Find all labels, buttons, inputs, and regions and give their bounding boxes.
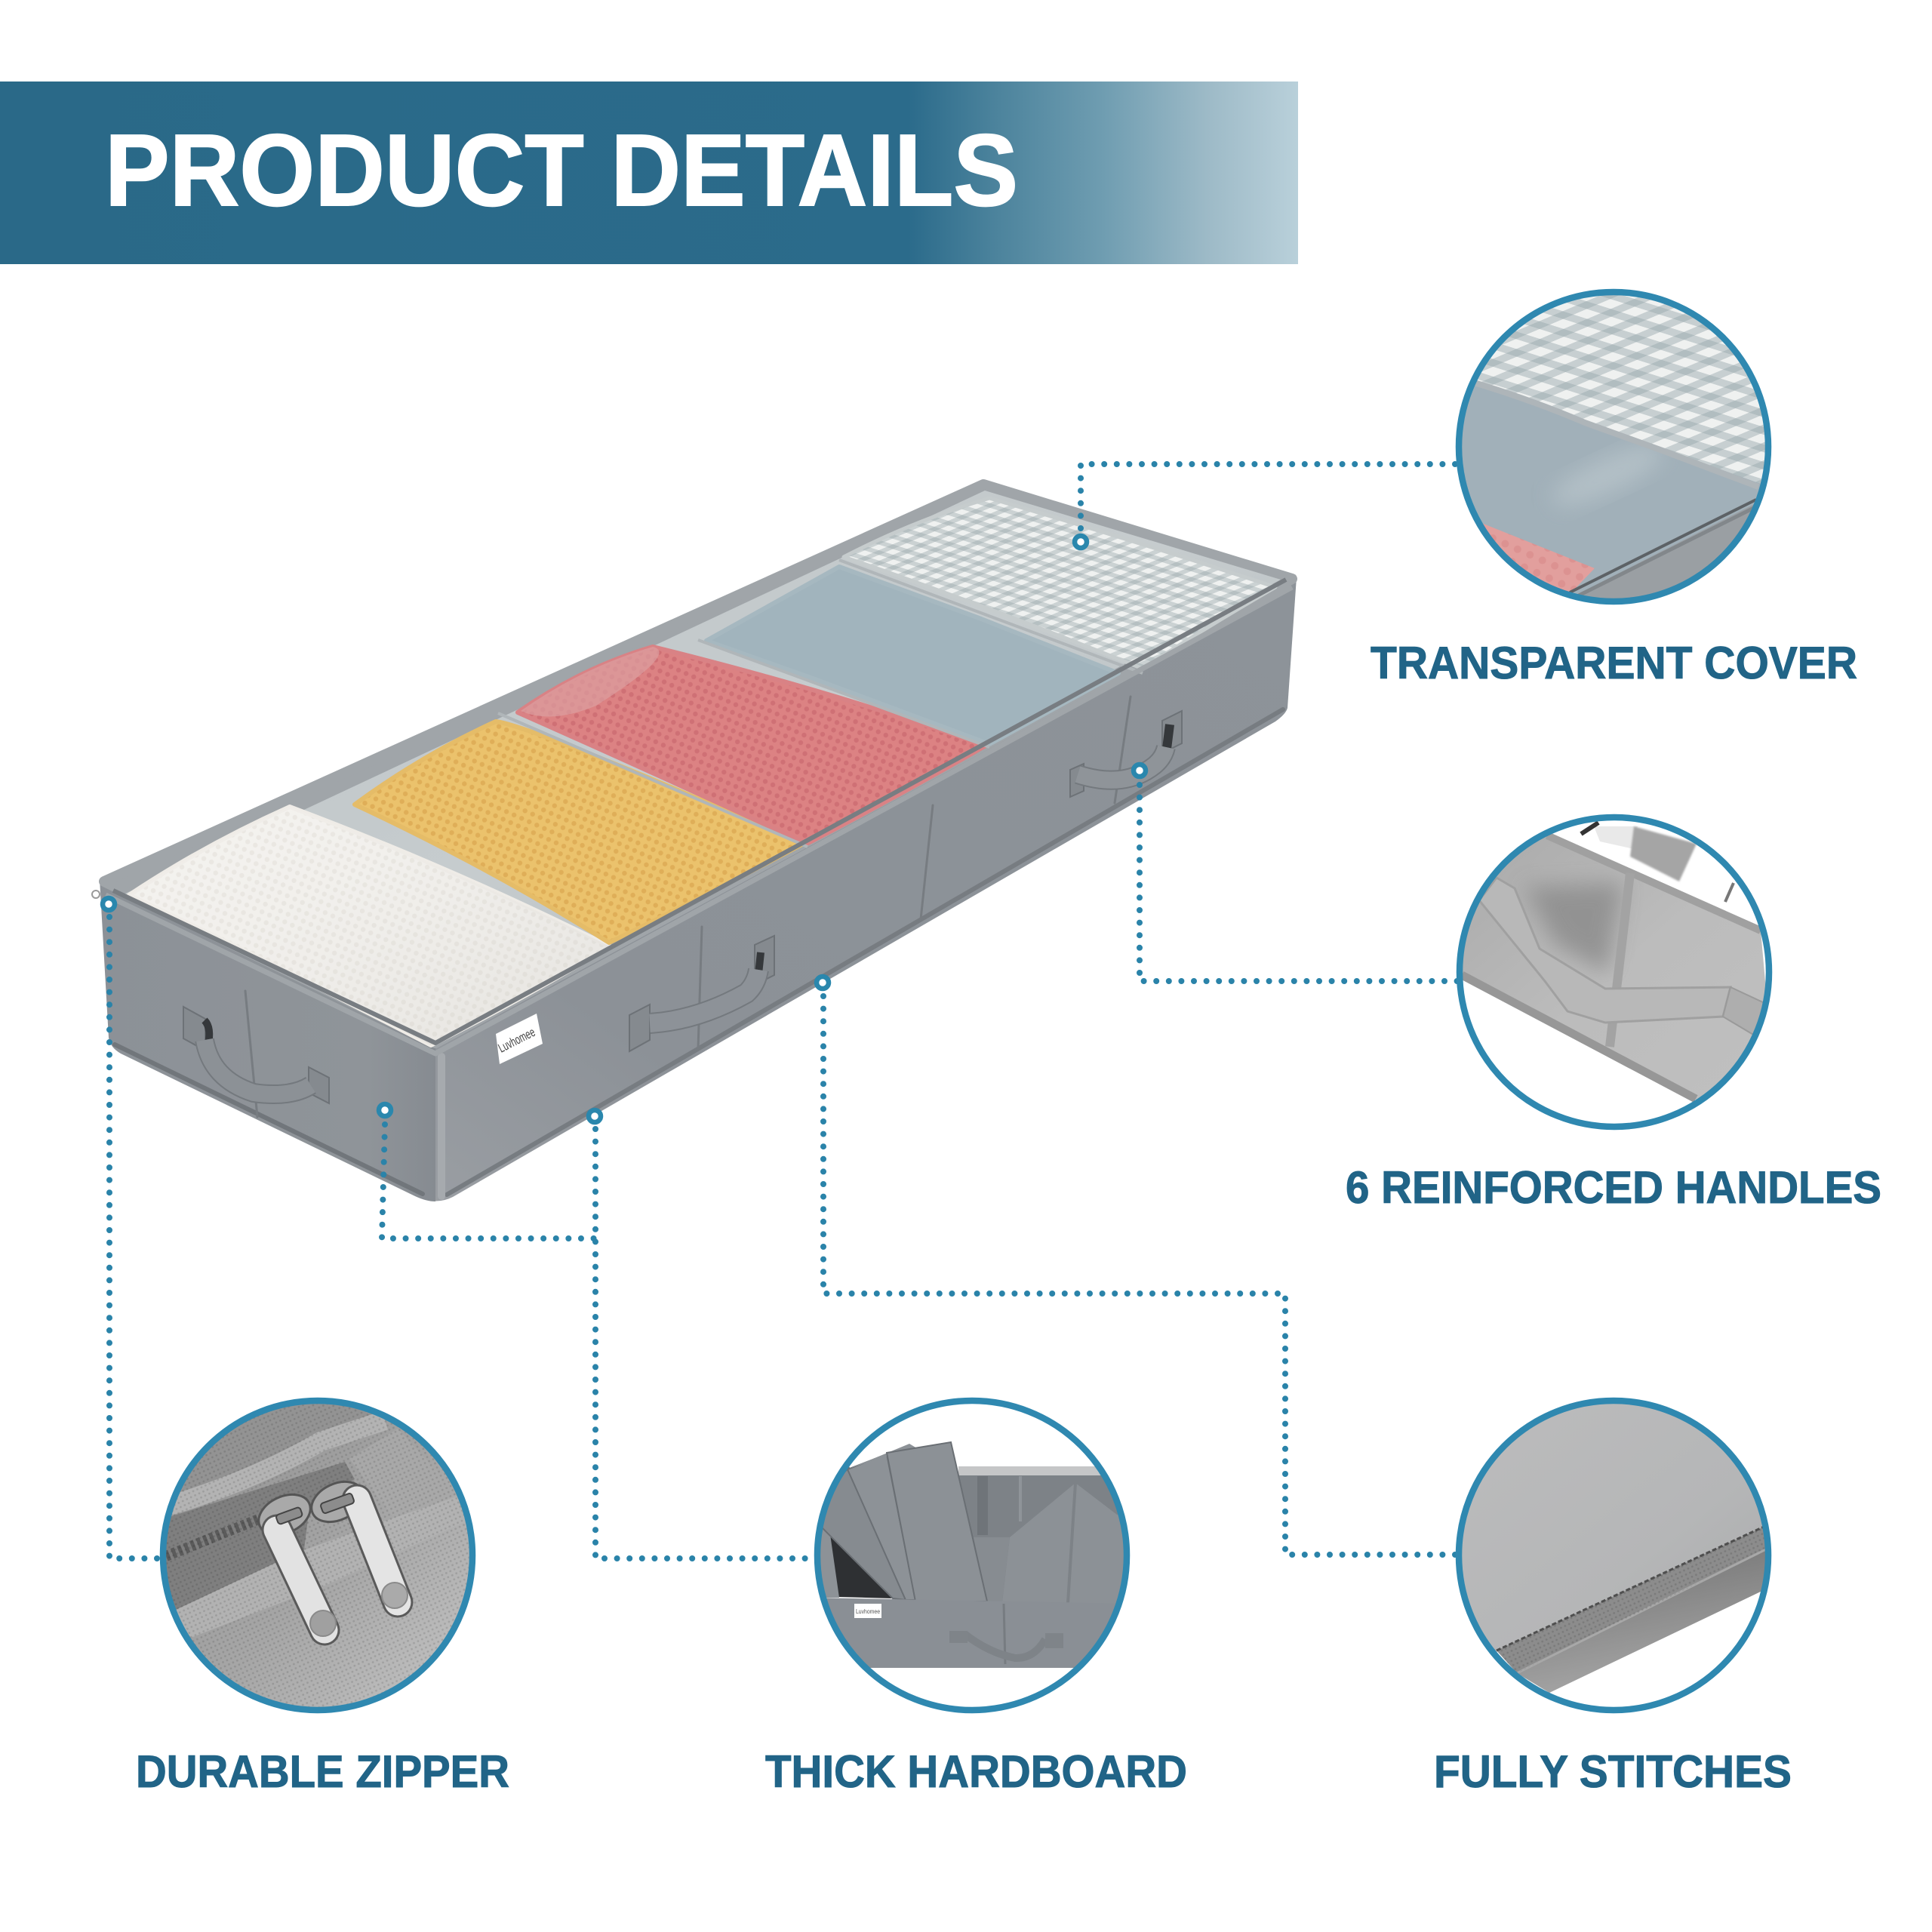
label: transparent cover: TRANSPARENT COVER bbox=[1371, 638, 1857, 688]
piping bbox=[170, 1420, 385, 1506]
pull right bbox=[305, 1474, 408, 1608]
banner bbox=[0, 82, 1298, 264]
white blanket bbox=[129, 807, 610, 1045]
zipper tape bbox=[162, 1462, 355, 1610]
back rim bbox=[958, 1466, 1100, 1475]
transparent window bbox=[124, 491, 1281, 1036]
product: storage bag bbox=[92, 485, 1297, 1201]
bag short side bbox=[100, 879, 435, 1201]
leader: side branch bbox=[382, 1124, 595, 1238]
brand label bbox=[496, 1014, 543, 1064]
label tag bbox=[854, 1604, 881, 1618]
handle strap bbox=[1479, 878, 1730, 1023]
film background bbox=[1462, 386, 1761, 594]
contents behind bbox=[1594, 826, 1638, 849]
title: PRODUCT DETAILS bbox=[105, 113, 1018, 227]
folded boards bbox=[815, 1468, 906, 1600]
zipper line bbox=[1570, 500, 1756, 592]
lower fabric bbox=[1517, 1547, 1777, 1693]
shadow under strap bbox=[1524, 883, 1623, 974]
leader: fully stitches bbox=[823, 996, 1458, 1555]
gingham fabric bbox=[1478, 296, 1765, 483]
hem bottom bbox=[1462, 975, 1696, 1099]
left handle bbox=[183, 1007, 329, 1103]
pink fabric bbox=[1483, 524, 1595, 592]
divider bbox=[1002, 1483, 1128, 1604]
label: fully stitches: FULLY STITCHES bbox=[1434, 1746, 1792, 1797]
yellow blanket bbox=[355, 721, 803, 943]
right handle bbox=[1070, 711, 1182, 797]
lid frame bbox=[104, 485, 1292, 1043]
lower panel bbox=[1583, 504, 1754, 598]
fabric texture bbox=[158, 1396, 475, 1713]
pink blanket bbox=[518, 647, 986, 844]
label tag: Luvhomee bbox=[856, 1608, 880, 1615]
zipper seam bbox=[106, 580, 1292, 1054]
gingham blanket bbox=[844, 498, 1275, 669]
dark gap bbox=[826, 1532, 893, 1598]
teal blanket bbox=[706, 567, 1118, 744]
panel bbox=[1463, 836, 1766, 1100]
pink fold bbox=[521, 647, 659, 717]
label: handles: 6 REINFORCED HANDLES bbox=[1346, 1162, 1881, 1213]
dotted leader lines bbox=[109, 464, 1458, 1558]
right band bbox=[350, 1449, 365, 1463]
small handle bbox=[964, 1634, 1045, 1658]
brand label: Luvhomee bbox=[496, 1025, 537, 1056]
marker dots bbox=[103, 536, 1146, 1122]
lower band bbox=[177, 1506, 432, 1638]
pull left bbox=[252, 1487, 336, 1636]
fold edge bbox=[1472, 382, 1758, 487]
leader: durable zipper bbox=[109, 917, 160, 1558]
callout: handles bbox=[1453, 811, 1777, 1136]
callout: thick hardboard bbox=[811, 1396, 1136, 1721]
front panel bbox=[811, 1598, 1132, 1668]
leader: transparent cover bbox=[1081, 464, 1458, 528]
seam band bbox=[1497, 1527, 1766, 1673]
centre wall bbox=[974, 1537, 1010, 1601]
callout: fully stitches bbox=[1453, 1396, 1777, 1721]
seam bbox=[1610, 873, 1630, 1047]
upper fabric bbox=[1453, 1396, 1777, 1660]
crumpled film bbox=[306, 1406, 371, 1437]
tab bbox=[1724, 987, 1763, 1035]
label: durable zipper: DURABLE ZIPPER bbox=[136, 1746, 509, 1797]
leader: reinforced handles bbox=[1140, 785, 1458, 981]
window dividers bbox=[498, 560, 1143, 847]
back wall bbox=[958, 1475, 1124, 1604]
hem top bbox=[1547, 835, 1761, 931]
callout: transparent cover bbox=[1449, 279, 1781, 611]
bottom hems bbox=[115, 697, 1283, 1196]
callout: durable zipper bbox=[158, 1396, 483, 1713]
zipper ring bbox=[92, 891, 100, 898]
label: thick hardboard: THICK HARDBOARD bbox=[765, 1746, 1187, 1797]
bag long side bbox=[423, 577, 1297, 1201]
middle handle bbox=[629, 936, 774, 1051]
leader: thick hardboard bbox=[595, 1129, 815, 1558]
